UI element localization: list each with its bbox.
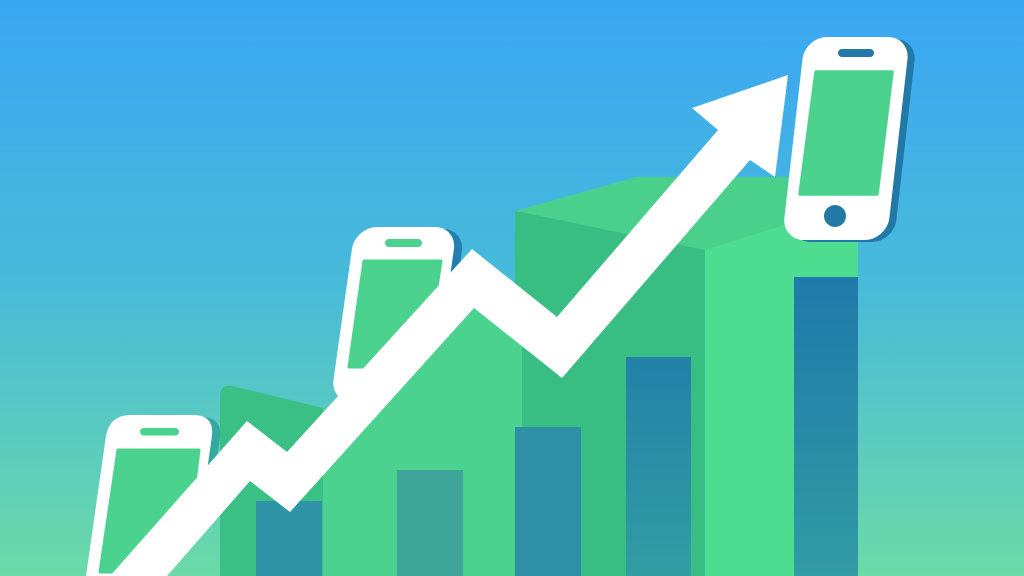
arrow: rising trend xyxy=(110,75,788,576)
block: middle xyxy=(323,280,522,576)
phone: small bottom left xyxy=(86,415,220,576)
block: large back front face xyxy=(515,211,705,576)
bar 2 xyxy=(397,470,463,576)
bar 1 xyxy=(256,501,322,576)
phone: medium centre xyxy=(330,227,465,404)
block: large back top face xyxy=(515,177,810,250)
phone: large top right xyxy=(782,37,917,242)
bar 4 xyxy=(626,357,691,576)
bar 3 xyxy=(515,427,581,576)
block: back left xyxy=(220,386,323,576)
block: right front xyxy=(705,220,858,576)
bar 5 xyxy=(794,277,858,576)
